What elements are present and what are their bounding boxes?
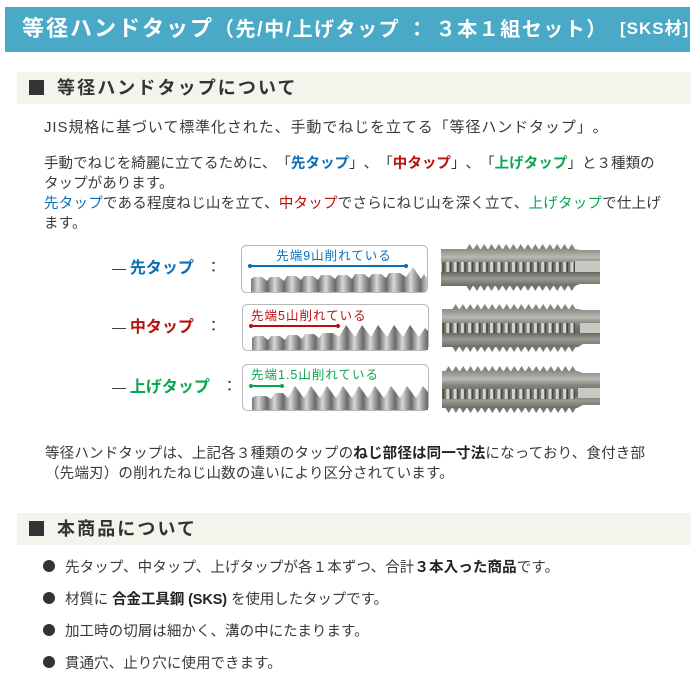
photo: second tap [442, 304, 600, 352]
section heading: about tap [17, 72, 691, 104]
explanation paragraph: 手動でねじを綺麗に立てるために、「先タップ」、「中タップ」、「上げタップ」と３種類の [44, 156, 655, 172]
bullet 3: 加工時の切屑は細かく、溝の中にたまります。 [65, 624, 369, 640]
label: finishing tap: ： [222, 378, 237, 395]
title banner [5, 7, 690, 52]
note paragraph: 等径ハンドタップは、上記各３種類のタップのねじ部径は同一寸法になっており、食付き部 [45, 446, 645, 462]
section heading: about product [17, 513, 691, 545]
bullet 4: 貫通穴、止り穴に使用できます。 [65, 656, 282, 672]
material tag: [SKS材] [620, 19, 689, 38]
diagram: finishing tap, 1.5 threads cut [242, 364, 428, 410]
diagram: first tap, 9 threads cut: 先端9山削れている [276, 249, 392, 263]
diagram: first tap, 9 threads cut [242, 246, 428, 292]
photo: finishing tap [442, 366, 600, 413]
section heading: about tap: 等径ハンドタップについて [57, 78, 298, 98]
photo: first tap [441, 244, 600, 291]
explanation paragraph: タップがあります。 [44, 176, 174, 192]
explanation paragraph [44, 155, 661, 232]
label: second tap: ： [206, 318, 221, 335]
diagram: second tap, 5 threads cut: 先端5山削れている [251, 309, 367, 323]
title text: 等径ハンドタップ（先/中/上げタップ ： ３本１組セット） [22, 16, 608, 41]
label: second tap: ― 中タップ [112, 319, 194, 336]
note paragraph: （先端刃）の削れたねじ山数の違いにより区分されています。 [45, 466, 454, 482]
bullet 1: 先タップ、中タップ、上げタップが各１本ずつ、合計３本入った商品です。 [65, 560, 559, 576]
label: first tap: ： [206, 259, 221, 276]
bullet 2: 材質に 合金工具鋼 (SKS) を使用したタップです。 [65, 592, 388, 608]
feature list [43, 559, 559, 672]
explanation paragraph: ます。 [44, 216, 87, 232]
section heading: about product: 本商品について [57, 519, 197, 539]
label: finishing tap: ― 上げタップ [112, 379, 210, 396]
diagram: second tap, 5 threads cut [242, 304, 428, 350]
note paragraph [45, 445, 645, 482]
label: first tap: ― 先タップ [112, 260, 194, 277]
intro text: JIS規格に基づいて標準化された、手動でねじを立てる「等径ハンドタップ」。 [44, 119, 609, 136]
explanation paragraph: 先タップである程度ねじ山を立て、中タップでさらにねじ山を深く立て、上げタップで仕上げ [44, 196, 661, 212]
diagram: finishing tap, 1.5 threads cut: 先端1.5山削れている [251, 368, 379, 382]
